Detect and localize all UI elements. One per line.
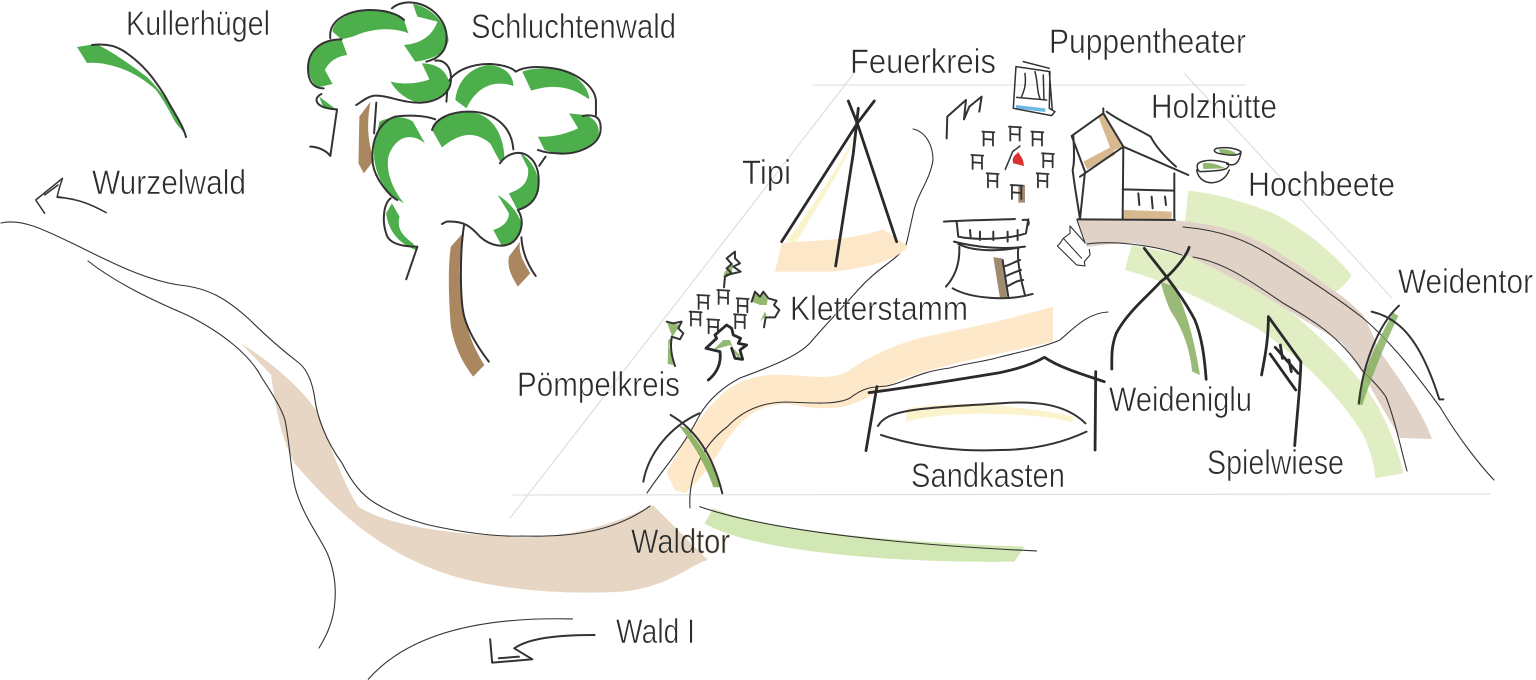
label: Pömpelkreis: Pömpelkreis <box>517 366 680 404</box>
perspective frame of the site <box>510 72 1490 518</box>
label: Puppentheater: Puppentheater <box>1049 23 1246 61</box>
label: Holzhütte: Holzhütte <box>1151 88 1277 126</box>
arrow: to Wurzelwald <box>36 178 106 213</box>
label: Wurzelwald: Wurzelwald <box>92 164 246 202</box>
tree: back left canopy <box>308 2 451 173</box>
Weideniglu <box>1112 247 1206 379</box>
Weidentor <box>1357 306 1443 405</box>
label: Tipi: Tipi <box>742 154 791 192</box>
path: lower meadow strip <box>1125 245 1403 478</box>
label: Hochbeete: Hochbeete <box>1248 166 1395 204</box>
stairs beside hut <box>1057 226 1090 266</box>
path: sand coloured trail <box>667 307 1053 493</box>
label: Sandkasten: Sandkasten <box>911 457 1065 495</box>
Waldtor gate <box>643 413 722 493</box>
path: brown right road <box>1077 220 1432 439</box>
Tipi <box>775 101 908 272</box>
tree: back right canopy <box>449 64 601 166</box>
path line to Wald I <box>368 619 573 679</box>
Pömpelkreis stools and climbing trees <box>667 252 779 380</box>
label: Kullerhügel: Kullerhügel <box>126 5 270 43</box>
label: Wald I: Wald I <box>616 613 695 651</box>
tree: front canopy and trunk <box>372 112 539 377</box>
Holzhütte <box>1072 108 1188 220</box>
label: Kletterstamm: Kletterstamm <box>790 290 968 328</box>
Spielwiese sign <box>1262 317 1301 446</box>
kullerhügel hill <box>77 44 186 137</box>
Feuerkreis: wall, fire and stools <box>947 97 1054 203</box>
Puppentheater icon <box>1013 62 1055 116</box>
path: brown forest road <box>241 343 708 593</box>
road outline lines <box>1 129 1494 648</box>
label: Waldtor: Waldtor <box>631 523 730 561</box>
label: Weideniglu: Weideniglu <box>1109 381 1252 419</box>
label: Feuerkreis: Feuerkreis <box>850 43 996 81</box>
label: Spielwiese: Spielwiese <box>1207 444 1344 482</box>
arrow: to Wald I <box>490 635 595 663</box>
trees: Schluchtenwald <box>308 2 601 377</box>
Sandkasten <box>866 357 1104 451</box>
path: upper meadow strip <box>1185 191 1352 295</box>
Kletterstamm tower <box>944 219 1033 298</box>
Hochbeete <box>1197 148 1241 183</box>
path: green strip below gate <box>700 507 1037 562</box>
label: Schluchtenwald: Schluchtenwald <box>471 8 676 46</box>
